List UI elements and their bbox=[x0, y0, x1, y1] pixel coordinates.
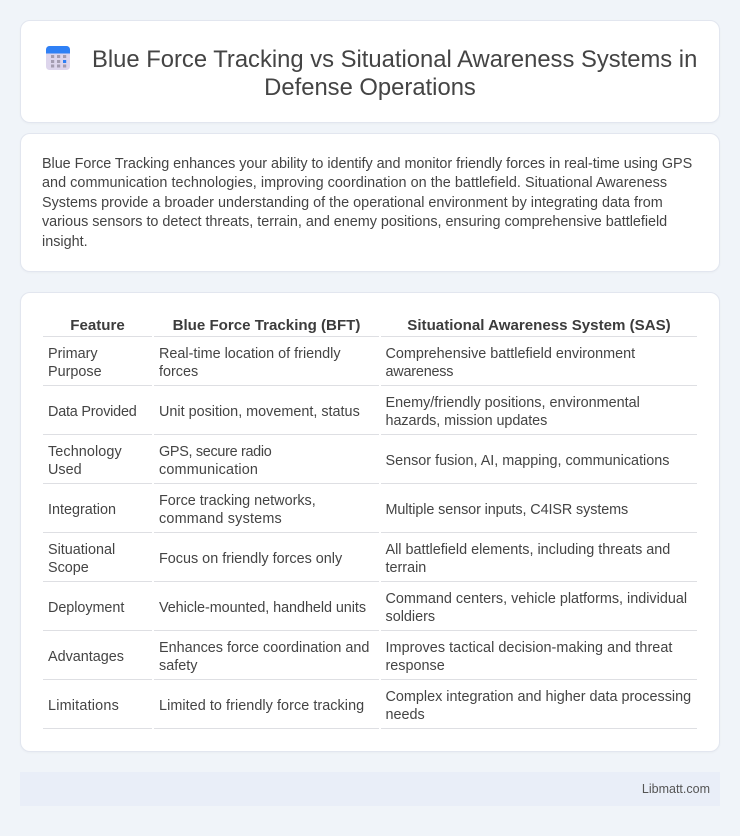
row: integration: command systems bbox=[159, 511, 282, 527]
row: primary purpose: Comprehensive battlefield environment bbox=[386, 346, 635, 362]
row: situational scope: terrain bbox=[386, 560, 426, 576]
row: deployment: Deployment bbox=[48, 600, 124, 616]
row: limitations: Limited to friendly force tracking bbox=[159, 698, 364, 714]
row: situational scope: Focus on friendly forces only bbox=[159, 551, 342, 567]
row: technology used: Used bbox=[48, 462, 82, 478]
title: Defense Operations bbox=[264, 74, 476, 101]
row: limitations: Limitations bbox=[48, 698, 119, 714]
text block: intro paragraph: insight. bbox=[42, 234, 88, 250]
icon: calendar bbox=[46, 46, 70, 70]
row: primary purpose: Primary bbox=[48, 346, 98, 362]
text block: intro paragraph: various sensors to detect threats, terrain, and enemy positions, ensuring comprehensive battlefield bbox=[42, 214, 667, 230]
row: situational scope: Situational bbox=[48, 542, 115, 558]
row: integration: Integration bbox=[48, 502, 116, 518]
text block: intro paragraph: Blue Force Tracking enhances your ability to identify and monitor friendly forces in real-time using GPS bbox=[42, 156, 692, 172]
row: advantages bbox=[48, 640, 672, 674]
title: Blue Force Tracking vs Situational Awareness Systems in bbox=[92, 46, 697, 73]
footer bar bbox=[20, 772, 720, 806]
row: integration: Multiple sensor inputs, C4ISR systems bbox=[386, 502, 628, 518]
row: advantages: Improves tactical decision-making and threat bbox=[386, 640, 672, 656]
row: primary purpose: Purpose bbox=[48, 364, 102, 380]
row: limitations: needs bbox=[386, 707, 425, 723]
row: data provided: Enemy/friendly positions, environmental bbox=[386, 395, 640, 411]
text block: intro paragraph bbox=[42, 156, 692, 250]
row: primary purpose bbox=[48, 346, 636, 380]
text block: intro paragraph: Systems provide a broader understanding of the operational environment by integrating data from bbox=[42, 195, 663, 211]
row: deployment bbox=[48, 591, 687, 625]
row: integration: Force tracking networks, bbox=[159, 493, 316, 509]
row: situational scope bbox=[48, 542, 670, 576]
row: deployment: Command centers, vehicle platforms, individual bbox=[386, 591, 687, 607]
row: data provided bbox=[48, 395, 640, 429]
row: deployment: Vehicle-mounted, handheld units bbox=[159, 600, 366, 616]
row: advantages: Enhances force coordination and bbox=[159, 640, 369, 656]
row: technology used: communication bbox=[159, 462, 258, 478]
row: limitations: Complex integration and higher data processing bbox=[386, 689, 691, 705]
row: situational scope: All battlefield elements, including threats and bbox=[386, 542, 670, 558]
row: advantages: response bbox=[386, 658, 445, 674]
row: advantages: Advantages bbox=[48, 649, 124, 665]
row: situational scope: Scope bbox=[48, 560, 89, 576]
table header: Feature bbox=[70, 317, 125, 334]
title bbox=[92, 46, 697, 101]
row: data provided: hazards, mission updates bbox=[386, 413, 547, 429]
row: technology used: Technology bbox=[48, 444, 122, 460]
row: primary purpose: forces bbox=[159, 364, 198, 380]
table header bbox=[70, 317, 671, 334]
row: technology used: Sensor fusion, AI, mapping, communications bbox=[386, 453, 669, 469]
text block: intro paragraph: and communication technologies, improving coordination on the battlefield. Situational Awareness bbox=[42, 175, 667, 191]
table header: Situational Awareness System (SAS) bbox=[407, 317, 671, 334]
table header: Blue Force Tracking (BFT) bbox=[173, 317, 360, 334]
row: limitations bbox=[48, 689, 691, 723]
row: primary purpose: Real-time location of friendly bbox=[159, 346, 341, 362]
panel: title card bbox=[20, 20, 720, 123]
panel: intro text bbox=[20, 133, 720, 272]
row: advantages: safety bbox=[159, 658, 197, 674]
row: integration bbox=[48, 493, 628, 527]
comparison table bbox=[43, 317, 697, 729]
row: primary purpose: awareness bbox=[386, 364, 453, 380]
row: deployment: soldiers bbox=[386, 609, 435, 625]
row: technology used: GPS, secure radio bbox=[159, 444, 271, 460]
panel: comparison table bbox=[20, 292, 720, 752]
row: technology used bbox=[48, 444, 669, 478]
row: data provided: Unit position, movement, status bbox=[159, 404, 360, 420]
row: data provided: Data Provided bbox=[48, 404, 137, 420]
footer text: Libmatt.com bbox=[642, 782, 710, 796]
